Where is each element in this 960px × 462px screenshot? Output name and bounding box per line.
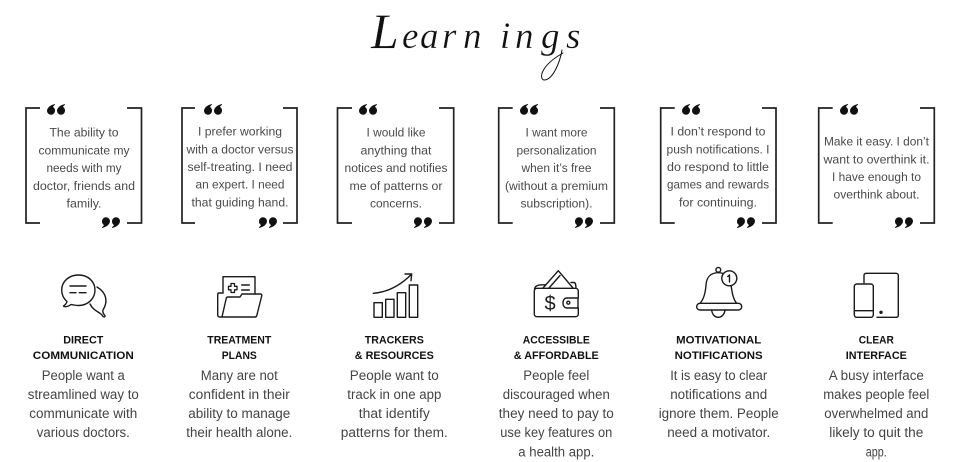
panel: quote 1: family. xyxy=(66,197,102,211)
panel: trackers and resources xyxy=(341,274,448,440)
panel: quote 1: doctor, friends and xyxy=(33,179,135,193)
heading xyxy=(846,334,907,362)
panel: quote 2: self-treating. I need xyxy=(188,160,293,174)
icon: wallet: $ xyxy=(544,293,556,315)
text block: communicate with xyxy=(29,406,137,421)
panel: quote 5: for continuing. xyxy=(679,195,757,209)
panel: quote 4 xyxy=(499,104,614,228)
text block: Many are not xyxy=(201,368,278,383)
panel: quote 5 xyxy=(661,104,776,228)
heading xyxy=(355,334,434,362)
text block: A busy interface xyxy=(829,368,924,383)
heading xyxy=(33,334,134,362)
text block: app. xyxy=(866,444,887,460)
text block xyxy=(499,368,614,460)
text block xyxy=(28,368,139,440)
panel: quote 1: needs with my xyxy=(46,161,122,175)
text block xyxy=(823,368,929,460)
text block: overwhelmed and xyxy=(824,406,928,421)
panel: quote 1: communicate my xyxy=(38,144,130,158)
panel: clear interface xyxy=(823,273,929,460)
panel: quote 6: I have enough to xyxy=(832,170,921,184)
panel: quote 6: overthink about. xyxy=(834,188,920,202)
text block: likely to quit the xyxy=(829,425,923,440)
text block: that identify xyxy=(359,406,430,421)
text block: discouraged when xyxy=(503,387,610,402)
text block: ignore them. People xyxy=(659,406,779,421)
panel: quote 1: The ability to xyxy=(50,126,119,140)
panel: quote 5: I don’t respond to xyxy=(670,125,766,139)
panel: quote 2: with a doctor versus xyxy=(186,142,294,156)
panel: quote 5: do respond to little xyxy=(667,160,769,174)
heading xyxy=(514,334,599,362)
text block: a health app. xyxy=(518,444,594,460)
text block: People feel xyxy=(523,368,589,383)
heading: NOTIFICATIONS xyxy=(675,350,763,362)
icon: growth bar chart xyxy=(373,274,418,317)
text block: notifications and xyxy=(670,387,767,402)
panel: quote 2: an expert. I need xyxy=(196,178,285,192)
panel: quote 2 xyxy=(182,104,297,228)
text block: their health alone. xyxy=(186,425,292,440)
heading xyxy=(675,334,763,362)
heading: INTERFACE xyxy=(846,350,907,362)
text block: need a motivator. xyxy=(667,425,770,440)
heading: TREATMENT xyxy=(207,334,272,346)
heading: DIRECT xyxy=(63,334,104,346)
heading: TRACKERS xyxy=(365,334,424,346)
heading: CLEAR xyxy=(859,334,894,346)
text block xyxy=(659,368,779,440)
panel: quote 4: subscription). xyxy=(520,197,592,211)
panel: quote 5: push notifications. I xyxy=(666,142,770,156)
panel: quote 3: concerns. xyxy=(370,197,422,211)
text block: they need to pay to xyxy=(499,406,614,421)
panel: quote 6 xyxy=(819,104,934,228)
heading xyxy=(207,334,272,362)
text block: track in one app xyxy=(347,387,441,402)
panel: quote 1 xyxy=(26,104,142,228)
panel: quote 2: I prefer working xyxy=(198,125,282,139)
icon: wallet xyxy=(534,271,578,317)
icon: medical folder xyxy=(218,277,262,317)
panel: quote 3 xyxy=(338,104,454,228)
heading: & RESOURCES xyxy=(355,350,434,362)
title: L xyxy=(370,3,399,59)
text block: ability to manage xyxy=(188,406,290,421)
panel: quote 4: when it’s free xyxy=(521,161,592,175)
panel: quote 3: I would like xyxy=(366,126,426,140)
text block: streamlined way to xyxy=(28,387,139,402)
icon: speech bubbles xyxy=(62,275,106,317)
text block: People want to xyxy=(350,368,439,383)
text block: use key features on xyxy=(500,425,612,440)
panel: quote 6: want to overthink it. xyxy=(822,152,930,166)
panel: quote 3: notices and notifies xyxy=(344,161,448,175)
text block xyxy=(186,368,292,440)
panel: quote 6: Make it easy. I don’t xyxy=(824,135,930,149)
title xyxy=(370,3,580,80)
panel: treatment plans xyxy=(186,277,292,440)
text block: makes people feel xyxy=(823,387,929,402)
heading: PLANS xyxy=(222,350,257,362)
text block: various doctors. xyxy=(37,425,130,440)
text block: It is easy to clear xyxy=(670,368,768,383)
panel: motivational notifications xyxy=(659,267,779,440)
heading: MOTIVATIONAL xyxy=(676,334,762,346)
text block xyxy=(341,368,448,440)
panel: quote 5: games and rewards xyxy=(667,178,769,192)
text block: confident in their xyxy=(189,387,290,402)
panel: quote 2: that guiding hand. xyxy=(192,195,288,209)
panel: quote 4: (without a premium xyxy=(505,179,608,193)
panel: accessible and affordable xyxy=(499,271,614,460)
heading: & AFFORDABLE xyxy=(514,350,599,362)
panel: quote 3: anything that xyxy=(360,144,432,158)
title: earnings xyxy=(402,16,580,57)
heading: ACCESSIBLE xyxy=(523,334,590,346)
text block: People want a xyxy=(42,368,125,383)
panel: direct communication xyxy=(28,275,139,440)
text block: patterns for them. xyxy=(341,425,448,440)
panel: quote 4: personalization xyxy=(516,144,597,158)
heading: COMMUNICATION xyxy=(33,350,134,362)
panel: quote 4: I want more xyxy=(526,126,588,140)
icon: bell with badge xyxy=(697,267,742,317)
panel: quote 3: me of patterns or xyxy=(350,179,442,193)
icon: phone and tablet xyxy=(854,273,898,317)
